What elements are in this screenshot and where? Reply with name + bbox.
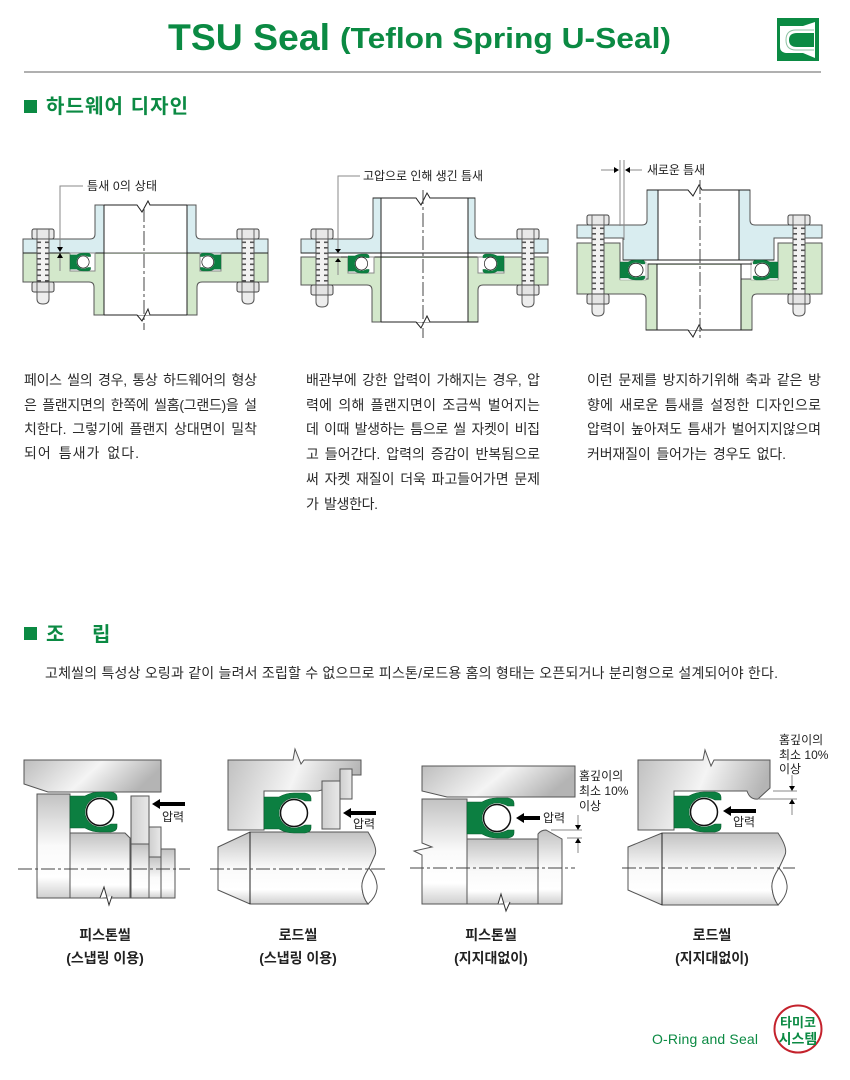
- text block: left: 치한다. 그렇기에 플랜지 상대면이 밀착: [24, 421, 257, 437]
- diagram: piston seal with snap ring: [18, 760, 190, 905]
- label: groove depth: 홈깊이의: [579, 769, 623, 783]
- seal right: [200, 253, 221, 271]
- icon: company seal logo: [777, 18, 819, 61]
- bolt left: [32, 229, 54, 304]
- label: zero gap: 틈새 0의 상태: [87, 179, 157, 193]
- label: pressure: 압력: [733, 815, 755, 829]
- label: pressure: 압력: [162, 810, 184, 824]
- text block: middle: 력에 의해 플랜지면이 조금씩 벌어지는: [306, 397, 540, 413]
- caption: rod seal snap ring: (스냅링 이용): [259, 950, 337, 966]
- seal: [70, 792, 117, 832]
- caption: rod seal snap ring: [259, 927, 337, 966]
- diagram: rod seal without backup: [622, 733, 829, 905]
- diagram: piston seal without backup: [410, 766, 629, 911]
- title: [168, 17, 671, 58]
- seal left: [620, 260, 645, 280]
- label: groove depth: [579, 769, 629, 813]
- text block: middle: 가 발생한다.: [306, 496, 378, 512]
- caption: piston seal snap ring: (스냅링 이용): [66, 950, 144, 966]
- caption: piston seal snap ring: 피스톤씰: [79, 927, 131, 943]
- arrow: pressure: [343, 808, 376, 818]
- text block: right: 압력이 높아져도 틈새가 벌어지지않으며: [587, 421, 821, 437]
- footer tagline: O-Ring and Seal: [652, 1031, 758, 1047]
- diagram: gap from high pressure: [301, 169, 548, 338]
- text block: middle: 써 자켓 재질이 더욱 파고들어가면 문제: [306, 471, 540, 487]
- caption: rod seal no backup: [675, 927, 749, 966]
- seal left: [70, 253, 91, 271]
- footer logo: stamp: [774, 1006, 822, 1052]
- heading: assembly: 립: [92, 623, 110, 646]
- seal right: [753, 260, 778, 280]
- caption: piston seal snap ring: [66, 927, 144, 966]
- diagram: rod seal with snap ring: [210, 749, 388, 904]
- seal left: [348, 254, 369, 273]
- label: gap from pressure: 고압으로 인해 생긴 틈새: [363, 169, 483, 183]
- arrow: pressure: [723, 806, 756, 816]
- caption: rod seal no backup: 로드씰: [693, 927, 731, 943]
- diagram: new gap design: [577, 160, 822, 340]
- seal: [467, 798, 514, 838]
- label: pressure: 압력: [353, 817, 375, 831]
- label: groove depth: [779, 733, 829, 776]
- text block: left: 은 플랜지면의 한쪽에 씰홈(그랜드)을 설: [24, 397, 257, 413]
- text block: right: 커버재질이 들어가는 경우도 없다.: [587, 446, 786, 462]
- title: (Teflon Spring U-Seal): [340, 23, 671, 55]
- caption: rod seal snap ring: 로드씰: [279, 927, 317, 943]
- bolt right: [237, 229, 259, 304]
- footer logo: stamp: 타미코: [780, 1015, 816, 1030]
- text block: left: 되어 틈새가 없다.: [24, 445, 139, 461]
- text block: right: 이런 문제를 방지하기위해 축과 같은 방: [587, 372, 821, 388]
- caption: rod seal no backup: (지지대없이): [675, 950, 749, 966]
- arrow: pressure: [152, 799, 185, 809]
- bolt right: [517, 229, 539, 307]
- heading: hardware design: 하드웨어 디자인: [46, 95, 188, 118]
- caption: piston seal no backup: 피스톤씰: [465, 927, 517, 943]
- seal right: [483, 254, 504, 273]
- label: groove depth: 최소 10%: [579, 784, 629, 798]
- text block: middle: 고 들어간다. 압력의 증감이 반복됨으로: [306, 446, 540, 462]
- bolt right: [788, 215, 810, 316]
- heading: assembly: 조: [46, 624, 64, 646]
- label: pressure: 압력: [543, 811, 565, 825]
- diagram: zero gap state: [23, 179, 268, 330]
- caption: piston seal no backup: [454, 927, 528, 966]
- text block: left: [24, 372, 257, 461]
- bolt left: [587, 215, 609, 316]
- assembly intro text: 고체씰의 특성상 오링과 같이 늘려서 조립할 수 없으므로 피스톤/로드용 홈의 형태는 오픈되거나 분리형으로 설계되어야 한다.: [45, 665, 778, 681]
- arrow: pressure: [516, 813, 540, 823]
- footer logo: stamp: 시스템: [779, 1031, 817, 1047]
- label: groove depth: 이상: [579, 799, 601, 813]
- seal: [264, 793, 311, 833]
- title: TSU Seal: [168, 17, 330, 58]
- caption: piston seal no backup: (지지대없이): [454, 950, 528, 966]
- bolt left: [311, 229, 333, 307]
- seal: [674, 792, 721, 832]
- text block: right: 향에 새로운 틈새를 설정한 디자인으로: [587, 397, 821, 413]
- label: new gap: 새로운 틈새: [647, 163, 705, 177]
- label: groove depth: 홈깊이의: [779, 733, 823, 747]
- text block: middle: 배관부에 강한 압력이 가해지는 경우, 압: [306, 372, 540, 388]
- label: groove depth: 최소 10%: [779, 748, 829, 762]
- text block: middle: 데 이때 발생하는 틈으로 씰 자켓이 비집: [306, 421, 540, 437]
- text block: middle: [306, 372, 540, 512]
- heading: assembly: [24, 623, 110, 646]
- text block: right: [587, 372, 821, 462]
- text block: left: 페이스 씰의 경우, 통상 하드웨어의 형상: [24, 372, 257, 388]
- label: groove depth: 이상: [779, 762, 801, 776]
